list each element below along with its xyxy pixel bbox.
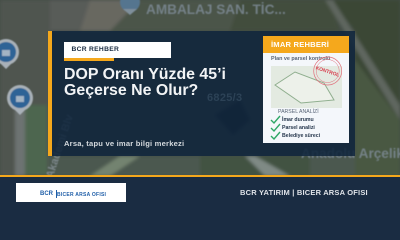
title: DOP Oranı Yüzde 45’i bbox=[64, 66, 226, 83]
footer logo box bbox=[16, 182, 126, 202]
item: imar durumu: İmar durumu bbox=[282, 116, 314, 122]
badge underline bbox=[64, 58, 114, 61]
card subheading: Plan ve parsel kontrolü bbox=[271, 56, 330, 62]
checklist bbox=[270, 116, 320, 140]
background: satellite map bbox=[0, 0, 400, 176]
map pin: top bbox=[120, 0, 140, 15]
footer bbox=[0, 174, 400, 210]
item: belediye sureci: Belediye süreci bbox=[282, 132, 320, 138]
title bbox=[64, 66, 226, 99]
logo BCR: BCR bbox=[40, 190, 53, 196]
panel: title panel bbox=[48, 31, 355, 156]
badge text: BCR REHBER bbox=[72, 46, 119, 53]
map label: parcel number: 6825/3 bbox=[207, 92, 242, 104]
map pin: left upper bbox=[0, 39, 19, 69]
check icons bbox=[270, 116, 280, 140]
card heading: İMAR REHBERİ bbox=[271, 40, 329, 49]
parcel plan figure bbox=[271, 56, 342, 108]
subtitle: Arsa, tapu ve imar bilgi merkezi bbox=[64, 138, 184, 148]
logo BCR bbox=[40, 190, 57, 198]
plan background bbox=[271, 66, 342, 108]
map pin: left lower bbox=[7, 85, 33, 115]
footer text: BCR YATIRIM | BICER ARSA OFISI bbox=[240, 188, 368, 197]
title: Geçerse Ne Olur? bbox=[64, 82, 198, 99]
map label: AMBALAJ: AMBALAJ SAN. TİC... bbox=[146, 2, 286, 17]
logo name: BICER ARSA OFISI bbox=[57, 192, 106, 198]
section label: PARSEL ANALİZİ bbox=[278, 108, 319, 114]
stamp: KONTROL: KONTROL bbox=[315, 65, 340, 79]
badge: BCR REHBER bbox=[64, 42, 171, 58]
parcel outline bbox=[275, 72, 334, 103]
item: parsel analizi: Parsel analizi bbox=[282, 124, 315, 130]
panel: imar rehberi card bbox=[263, 36, 349, 143]
card header bbox=[263, 36, 349, 53]
